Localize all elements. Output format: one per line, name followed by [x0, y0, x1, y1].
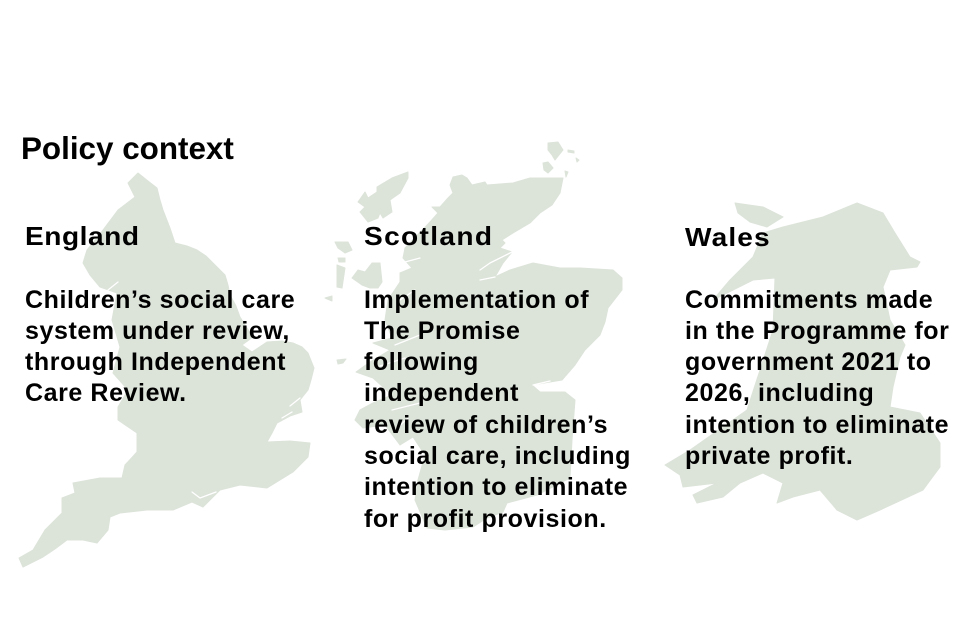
heading: England: England	[25, 221, 140, 251]
island: South Uist	[337, 265, 345, 288]
island: North Uist	[335, 242, 352, 253]
text: Wales: in the Programme for	[685, 317, 949, 345]
text: Wales: intention to eliminate	[685, 411, 949, 439]
text: England	[25, 286, 295, 407]
text: England: system under review,	[25, 317, 290, 345]
text: England: through Independent	[25, 348, 286, 376]
text: Scotland: for profit provision.	[364, 505, 607, 533]
text: Wales: government 2021 to	[685, 348, 932, 376]
text: Scotland: review of children’s	[364, 411, 608, 439]
text: Scotland: The Promise	[364, 317, 520, 345]
text: Scotland: social care, including	[364, 442, 631, 470]
text: Scotland: following	[364, 348, 479, 376]
text: England: Children’s social care	[25, 286, 295, 314]
map: Wales	[665, 203, 940, 520]
island: Lewis and Harris	[358, 172, 408, 222]
heading: Scotland: Scotland	[364, 221, 493, 251]
text: Wales: Commitments made	[685, 286, 933, 314]
islands: Orkney	[548, 142, 563, 160]
title: Policy context	[21, 131, 234, 166]
text: England: Care Review.	[25, 379, 187, 407]
text: Scotland: Implementation of	[364, 286, 589, 314]
text: Scotland	[364, 286, 631, 533]
island: Skye	[352, 263, 382, 288]
text: Scotland: independent	[364, 379, 519, 407]
text: Wales: private profit.	[685, 442, 853, 470]
text: Wales	[685, 286, 949, 470]
small islands	[325, 296, 346, 364]
text: Wales: 2026, including	[685, 379, 874, 407]
heading: Wales: Wales	[685, 222, 771, 252]
map: England	[19, 173, 314, 567]
text: Scotland: intention to eliminate	[364, 473, 628, 501]
map: Scotland	[325, 142, 622, 530]
